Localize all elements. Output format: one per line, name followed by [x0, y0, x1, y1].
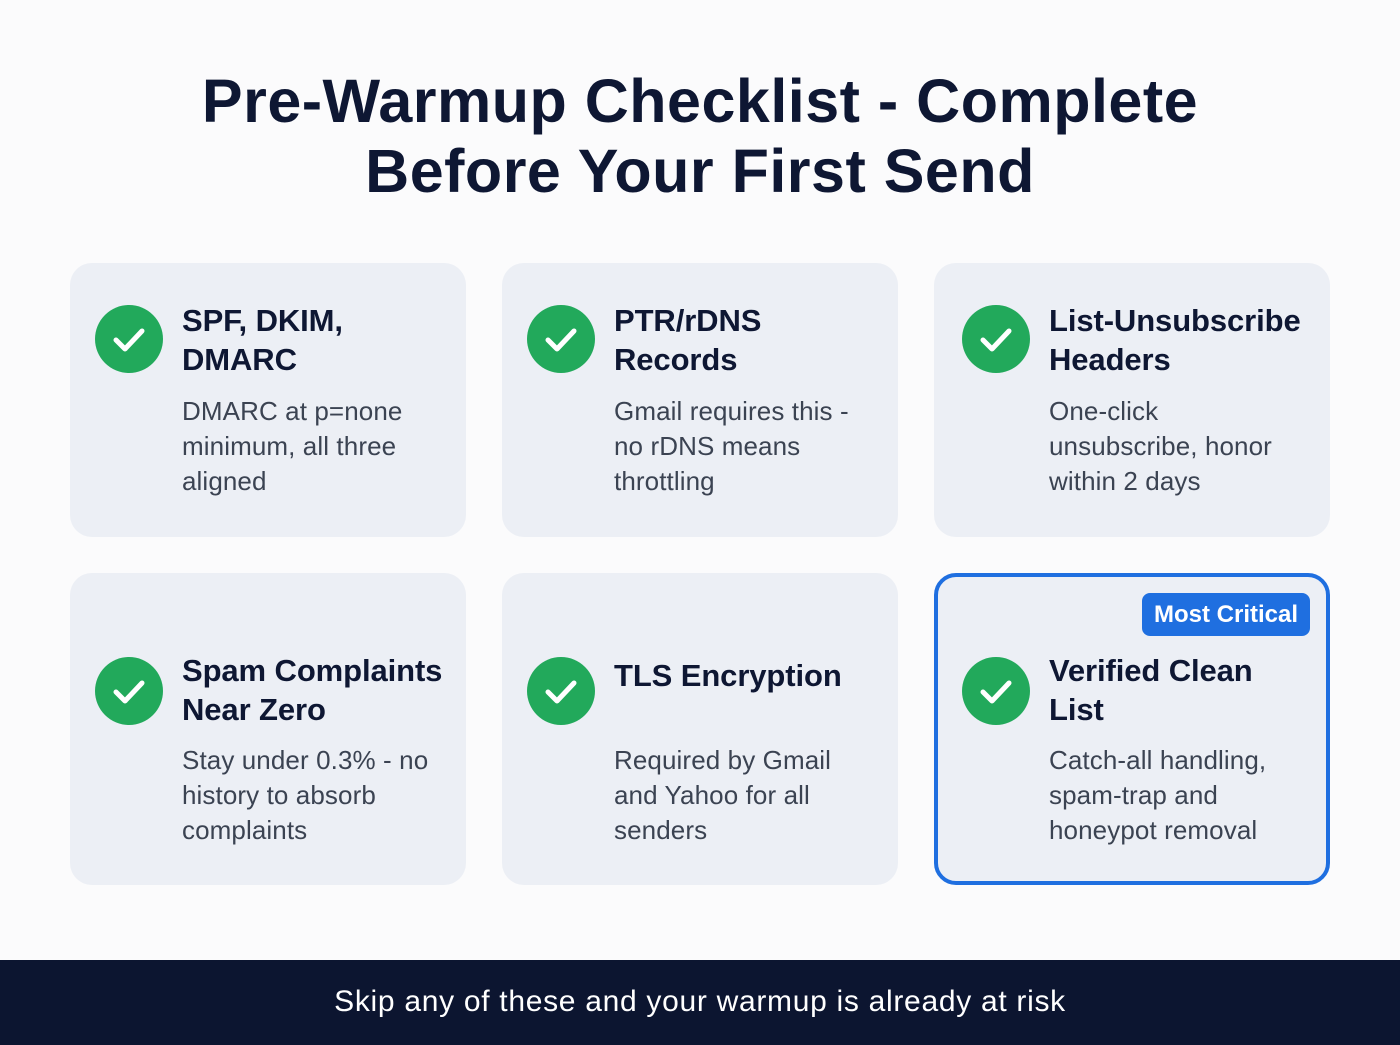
panel: SPF DKIM DMARC [70, 263, 466, 537]
body: history to absorb [182, 780, 376, 810]
body [182, 396, 402, 496]
body [614, 745, 831, 845]
heading: Spam Complaints [182, 653, 442, 688]
badge: Most Critical [1154, 601, 1298, 628]
body: aligned [182, 466, 267, 496]
body: DMARC at p=none [182, 396, 402, 426]
heading: Near Zero [182, 692, 326, 727]
heading: TLS Encryption [614, 658, 842, 693]
body: no rDNS means [614, 431, 800, 461]
body: senders [614, 815, 707, 845]
heading: Headers [1049, 342, 1171, 377]
heading: List [1049, 692, 1104, 727]
panel: TLS [502, 573, 898, 885]
heading [182, 303, 343, 377]
body: Catch-all handling, [1049, 745, 1266, 775]
icon: check [527, 305, 595, 373]
panel: Verified clean list [934, 573, 1330, 885]
body: One-click [1049, 396, 1158, 426]
title: Before Your First Send [365, 137, 1035, 205]
icon: check [962, 657, 1030, 725]
heading: List-Unsubscribe [1049, 303, 1301, 338]
title [202, 67, 1198, 205]
title: Pre-Warmup Checklist - Complete [202, 67, 1198, 135]
footer banner: Skip any of these and your warmup is already at risk [334, 985, 1066, 1018]
icon: check [527, 657, 595, 725]
body: honeypot removal [1049, 815, 1257, 845]
heading: SPF, DKIM, [182, 303, 343, 338]
body: throttling [614, 466, 715, 496]
body: Stay under 0.3% - no [182, 745, 428, 775]
heading [1049, 653, 1253, 727]
heading: PTR/rDNS [614, 303, 761, 338]
body: unsubscribe, honor [1049, 431, 1272, 461]
icon: check [95, 305, 163, 373]
footer banner [0, 960, 1400, 1045]
badge [1142, 593, 1310, 636]
heading: Records [614, 342, 737, 377]
body: Required by Gmail [614, 745, 831, 775]
icon: check [95, 657, 163, 725]
body: spam-trap and [1049, 780, 1218, 810]
heading [182, 653, 442, 727]
heading: DMARC [182, 342, 297, 377]
icon: check [962, 305, 1030, 373]
body: within 2 days [1049, 466, 1201, 496]
body [1049, 396, 1272, 496]
body: and Yahoo for all [614, 780, 810, 810]
panel: Spam complaints [70, 573, 466, 885]
body: complaints [182, 815, 307, 845]
heading [1049, 303, 1301, 377]
panel: PTR [502, 263, 898, 537]
heading: Verified Clean [1049, 653, 1253, 688]
body: minimum, all three [182, 431, 396, 461]
panel: List-Unsubscribe [934, 263, 1330, 537]
body: Gmail requires this - [614, 396, 849, 426]
body [182, 745, 428, 845]
body [614, 396, 849, 496]
body [1049, 745, 1266, 845]
heading [614, 303, 761, 377]
